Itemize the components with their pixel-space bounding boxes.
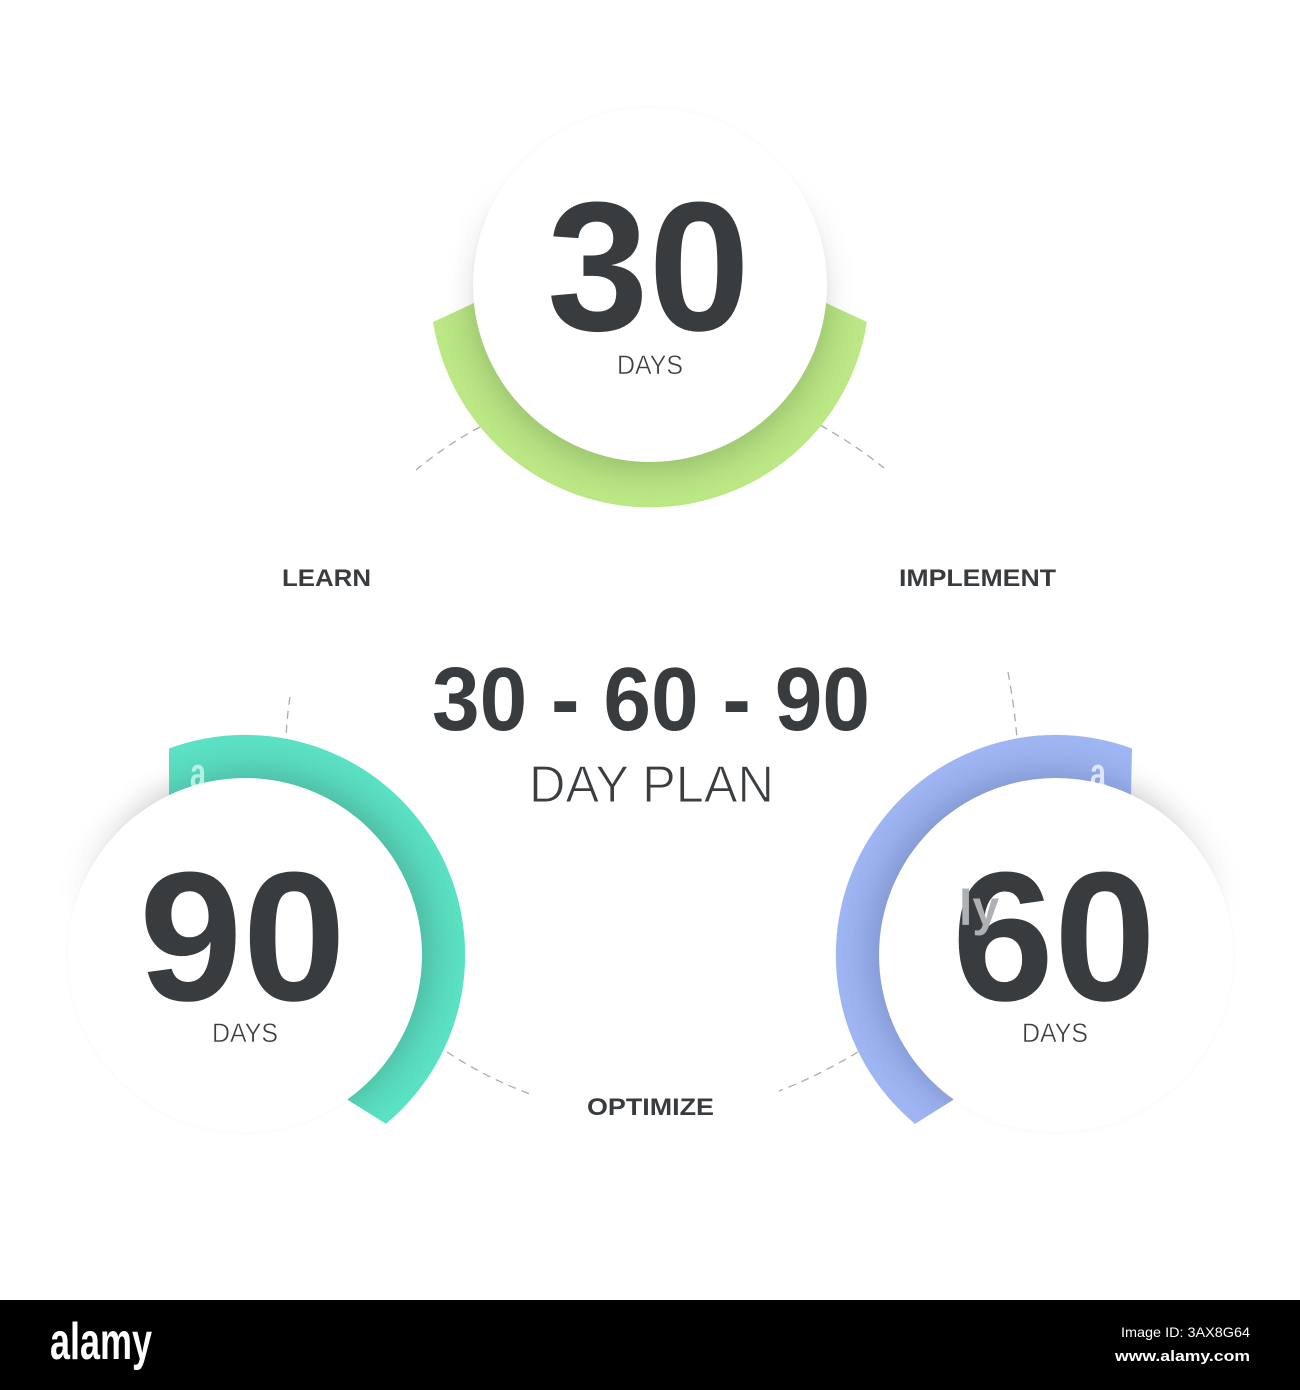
number 60: 60 — [952, 833, 1156, 1039]
label: learn: LEARN — [282, 565, 371, 592]
arc inner shading — [454, 303, 846, 488]
white circle — [68, 778, 422, 1132]
white circle — [473, 108, 827, 462]
website: www.alamy.com — [1114, 1348, 1250, 1365]
number 30: 30 — [547, 163, 750, 369]
blue arc — [836, 735, 1132, 1124]
watermark fragment: a — [1090, 749, 1106, 798]
arc inner shading — [169, 755, 448, 1110]
dashed connector: implement to 60 — [1008, 672, 1017, 738]
dashed connector: 30 to learn — [416, 427, 480, 470]
image id: Image ID: 3AX8G64 — [1121, 1324, 1250, 1340]
teal arc — [169, 735, 465, 1124]
title: 30 - 60 - 90: 30 - 60 - 90 — [432, 650, 870, 750]
label: implement: IMPLEMENT — [899, 565, 1056, 592]
faint circle outline shadow — [878, 777, 1234, 1133]
dashed connector: 90 to optimize — [447, 1052, 533, 1095]
label: optimize: OPTIMIZE — [587, 1094, 714, 1121]
green arc — [433, 303, 867, 507]
dashed connector: 60 to optimize — [779, 1052, 858, 1091]
watermark fragment: ly — [959, 880, 999, 936]
footer bar — [0, 1300, 1300, 1390]
panel: 60 days — [836, 735, 1237, 1133]
number 90: 90 — [139, 833, 346, 1039]
faint circle outline shadow — [472, 107, 828, 463]
circle shadow — [463, 228, 837, 308]
footer logo: alamy — [50, 1313, 152, 1371]
panel: 30 days — [433, 202, 867, 508]
subtitle: day plan: DAY PLAN — [529, 756, 774, 814]
days label: DAYS — [1022, 1018, 1088, 1048]
circle shadow — [1131, 775, 1214, 873]
white circle — [879, 778, 1233, 1132]
faint circle outline shadow — [67, 777, 423, 1133]
dashed connector: 30 to implement — [820, 425, 884, 468]
panel: 90 days — [64, 735, 465, 1133]
watermark fragment: a — [190, 749, 206, 798]
circle shadow — [88, 775, 169, 874]
days label: DAYS — [617, 350, 683, 380]
days label: DAYS — [212, 1018, 278, 1048]
arc inner shading — [854, 756, 1132, 1110]
dashed connector: learn to 90 — [286, 697, 290, 738]
